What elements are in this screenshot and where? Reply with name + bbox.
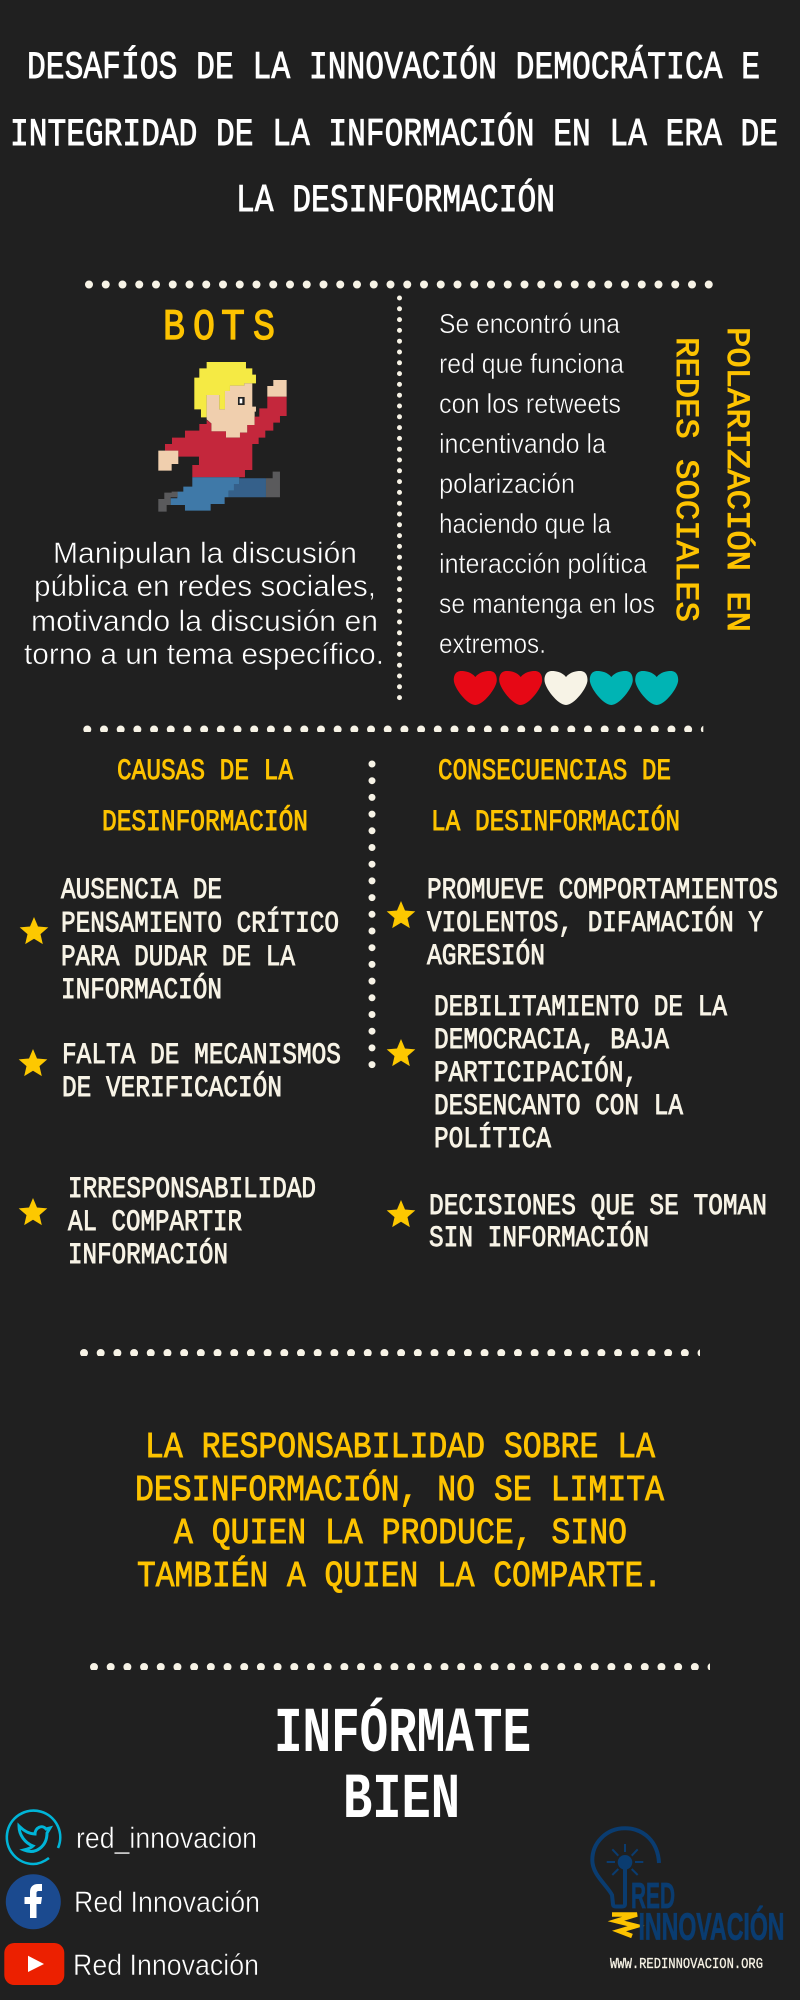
- item: debilitamiento: PARTICIPACIÓN,: [434, 1056, 638, 1091]
- item: mecanismos: DE VERIFICACIÓN: [62, 1071, 282, 1106]
- item: comportamientos violentos: AGRESIÓN: [427, 939, 545, 974]
- callout: responsibility message: A QUIEN LA PRODUCE, SINO: [174, 1513, 627, 1554]
- icon: youtube: [4, 1943, 64, 1985]
- heading: bots: S: [253, 303, 275, 353]
- text: bots description: torno a un tema específico.: [24, 638, 384, 671]
- vertical heading: polarización en: POLARIZACIÓN EN: [718, 327, 755, 632]
- item: debilitamiento: DESENCANTO CON LA: [434, 1090, 683, 1124]
- icon: star: [20, 917, 48, 944]
- callout: responsibility message: TAMBIÉN A QUIEN LA COMPARTE.: [137, 1555, 662, 1597]
- title: LA DESINFORMACIÓN: [236, 178, 555, 223]
- text: polarization description: interacción política: [439, 548, 647, 579]
- item: pensamiento crítico: [20, 874, 339, 1008]
- callout: responsibility message: [135, 1427, 664, 1597]
- text: polarization description: [439, 308, 655, 659]
- text: polarization description: polarización: [439, 468, 575, 499]
- text: polarization description: Se encontró una: [439, 308, 620, 339]
- text: polarization description: con los retweets: [439, 388, 621, 419]
- text: bots description: Manipulan la discusión: [53, 537, 357, 570]
- callout: responsibility message: LA RESPONSABILIDAD SOBRE LA: [145, 1427, 655, 1468]
- icon: star: [387, 1039, 415, 1066]
- text: bots description: motivando la discusión en: [31, 605, 378, 638]
- icon: star: [19, 1198, 47, 1225]
- item: pensamiento crítico: AUSENCIA DE: [61, 874, 222, 908]
- heading: consecuencias: [431, 755, 680, 840]
- heading: consecuencias: LA DESINFORMACIÓN: [431, 805, 680, 840]
- item: pensamiento crítico: PARA DUDAR DE LA: [61, 941, 295, 975]
- heading: bots: T: [221, 303, 245, 353]
- item: debilitamiento: [387, 991, 727, 1157]
- item: decisiones: [387, 1190, 767, 1256]
- item: debilitamiento: DEMOCRACIA, BAJA: [434, 1024, 669, 1058]
- text: website: WWW.REDINNOVACION.ORG: [610, 1956, 763, 1973]
- social links: [4, 1811, 260, 1985]
- icon: light bulb: [592, 1828, 659, 1906]
- text: youtube name: Red Innovación: [73, 1949, 259, 1982]
- heading: infórmate bien: [274, 1697, 531, 1837]
- heading: causas: [102, 755, 308, 840]
- heading: bots: O: [193, 303, 215, 353]
- item: irresponsabilidad: AL COMPARTIR: [68, 1206, 242, 1240]
- text: polarization description: incentivando la: [439, 428, 606, 459]
- text: bots description: [24, 537, 384, 671]
- callout: responsibility message: DESINFORMACIÓN, NO SE LIMITA: [135, 1468, 664, 1511]
- icon: star: [387, 1200, 415, 1227]
- item: mecanismos: FALTA DE MECANISMOS: [62, 1039, 341, 1073]
- logo: red innovación: [592, 1828, 784, 1973]
- text: red: RED: [631, 1875, 675, 1916]
- heading: bots: [163, 303, 275, 353]
- heading: infórmate bien: INFÓRMATE: [274, 1697, 531, 1771]
- icon: hearts row: [454, 671, 678, 705]
- item: pensamiento crítico: INFORMACIÓN: [61, 973, 222, 1008]
- item: debilitamiento: POLÍTICA: [434, 1122, 551, 1157]
- vertical heading: redes sociales: REDES SOCIALES: [667, 337, 704, 622]
- item: decisiones: SIN INFORMACIÓN: [429, 1221, 649, 1256]
- text: twitter handle: red_innovacion: [76, 1822, 257, 1855]
- heading: causas: CAUSAS DE LA: [117, 755, 293, 789]
- title: [10, 45, 778, 223]
- text: polarization description: se mantenga en los: [439, 588, 655, 619]
- text: bots description: pública en redes sociales,: [34, 570, 376, 603]
- item: mecanismos: [19, 1039, 341, 1106]
- icon: spring: [612, 1914, 637, 1936]
- icon: facebook: [6, 1874, 61, 1929]
- heading: causas: DESINFORMACIÓN: [102, 805, 308, 840]
- panel: consequences: [387, 755, 778, 1256]
- item: comportamientos violentos: [387, 874, 778, 974]
- icon: star: [387, 901, 415, 928]
- icon: twitter: [7, 1811, 60, 1864]
- text: polarization description: red que funciona: [439, 348, 624, 379]
- text: polarization description: haciendo que la: [439, 508, 611, 539]
- item: pensamiento crítico: PENSAMIENTO CRÍTICO: [61, 906, 339, 942]
- item: irresponsabilidad: INFORMACIÓN: [68, 1238, 228, 1273]
- heading: bots: B: [163, 303, 185, 353]
- panel: bots: [24, 303, 384, 671]
- panel: causes: [19, 755, 341, 1273]
- icon: star: [19, 1049, 47, 1076]
- panel: polarization: [439, 308, 755, 705]
- item: debilitamiento: DEBILITAMIENTO DE LA: [434, 991, 727, 1025]
- icon: running pixel character: [158, 362, 287, 512]
- text: polarization description: extremos.: [439, 628, 546, 659]
- heading: consecuencias: CONSECUENCIAS DE: [438, 755, 671, 789]
- text: facebook name: Red Innovación: [74, 1886, 260, 1919]
- item: irresponsabilidad: [19, 1173, 316, 1273]
- item: irresponsabilidad: IRRESPONSABILIDAD: [68, 1173, 316, 1207]
- heading: infórmate bien: BIEN: [343, 1765, 460, 1837]
